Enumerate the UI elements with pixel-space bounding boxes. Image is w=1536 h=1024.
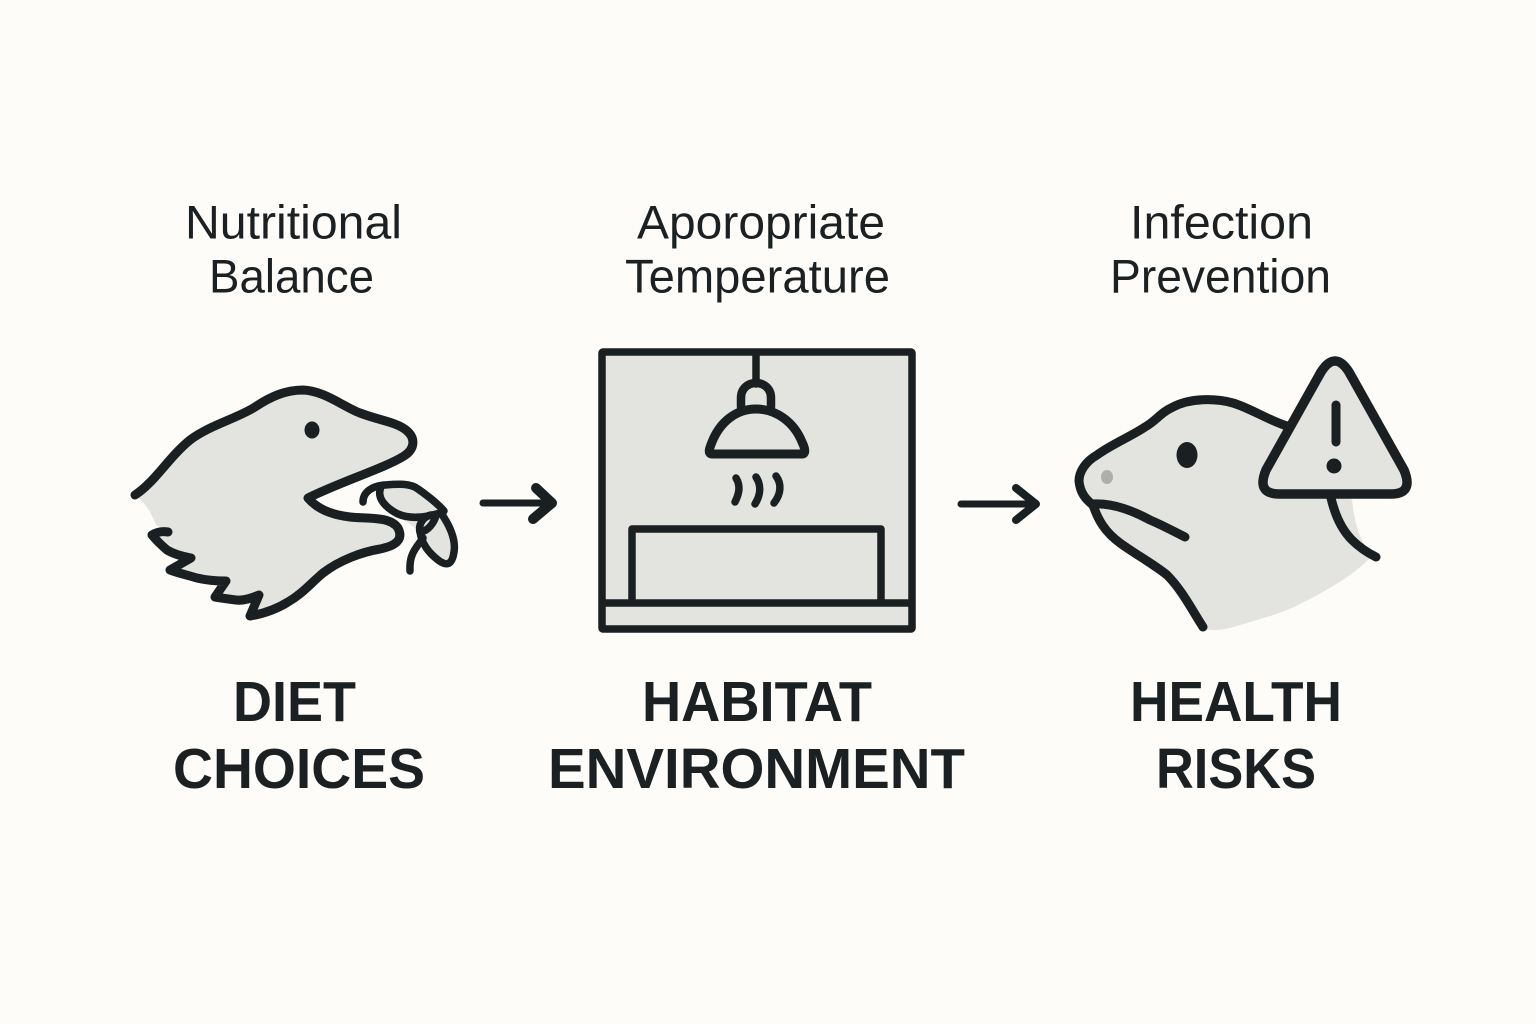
subtitle: Nutritional Balance: Balance (209, 250, 374, 304)
neck (1331, 498, 1376, 557)
heading: Health Risks (1130, 670, 1342, 801)
subtitle: Infection Prevention: Prevention (1110, 250, 1331, 304)
subtitle: Appropriate Temperature (625, 196, 890, 304)
heat lamp (709, 353, 805, 454)
icon: animal head with warning triangle (1079, 361, 1407, 630)
mouth (1093, 504, 1185, 537)
heading: Habitat Environment: ENVIRONMENT (548, 737, 965, 801)
heading: Habitat Environment (548, 670, 965, 801)
subtitle: Appropriate Temperature: Aporopriate (637, 196, 885, 250)
eye (304, 422, 320, 438)
chin and throat (1093, 505, 1203, 627)
arrow: diet to habitat (483, 488, 552, 519)
floor line (602, 599, 912, 607)
subtitle: Nutritional Balance: Nutritional (185, 196, 402, 250)
subtitle: Nutritional Balance (185, 196, 402, 304)
icon: animal eating a leaf (135, 390, 454, 616)
icon: habitat enclosure with heat lamp (602, 352, 912, 629)
arrow: habitat to health (961, 488, 1036, 520)
heading: Diet Choices (173, 670, 425, 801)
eye (1176, 442, 1198, 468)
leaf (363, 484, 454, 571)
subtitle: Appropriate Temperature: Temperature (625, 250, 890, 304)
heading: Habitat Environment: HABITAT (642, 670, 872, 734)
subtitle: Infection Prevention: Infection (1130, 196, 1313, 250)
heat waves (735, 476, 780, 504)
heading: Diet Choices: CHOICES (173, 737, 425, 801)
heading: Health Risks: HEALTH (1130, 670, 1342, 734)
heading: Health Risks: RISKS (1156, 737, 1316, 801)
nostril (1101, 470, 1113, 484)
basking platform (632, 529, 881, 603)
heading: Diet Choices: DIET (233, 670, 356, 734)
subtitle: Infection Prevention (1110, 196, 1331, 304)
warning triangle (1263, 361, 1407, 494)
